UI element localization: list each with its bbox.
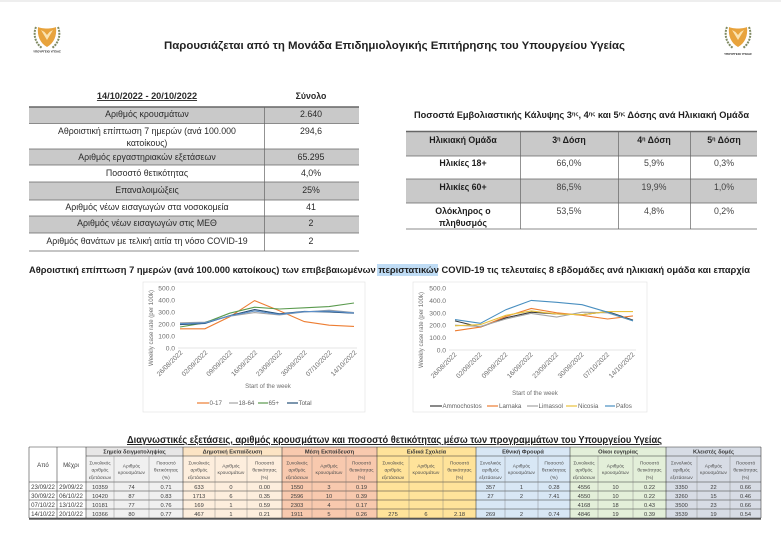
group: sampling points: 0.76 — [160, 503, 172, 509]
group: national guard: Εθνική Φρουρά — [502, 450, 544, 456]
group: secondary education: θετικότητας — [349, 466, 374, 474]
header row — [429, 135, 741, 145]
group: national guard — [476, 447, 570, 518]
row: reinfections — [115, 185, 320, 195]
x axis labels: 30/09/2022 — [557, 351, 586, 380]
group: closed structures: 22 — [710, 485, 717, 491]
x axis labels: 09/09/2022 — [481, 351, 510, 380]
legend: Total — [298, 400, 312, 407]
row: ages 18+ — [439, 158, 734, 168]
header row: Δόση — [561, 135, 586, 145]
group: closed structures: 15 — [710, 494, 717, 500]
group: sampling points: Σημεία δειγματοληψίας — [103, 450, 166, 456]
y axis labels: 300.0 — [429, 310, 446, 318]
row: 7-day incidence: Αθροιστική επίπτωση 7 ημερών (ανά 100.000 — [58, 126, 236, 136]
row: laboratory tests — [78, 152, 325, 162]
group: care homes: αριθμός — [576, 466, 593, 474]
y axis labels: 200.0 — [429, 322, 446, 330]
group: primary education: 467 — [194, 512, 204, 518]
row: ages 18+: Ηλικίες 18+ — [439, 158, 487, 168]
group: care homes: κρουσμάτων — [602, 469, 630, 476]
header row: Δόση — [646, 135, 671, 145]
group: primary education: 169 — [194, 503, 204, 509]
series lines — [180, 301, 354, 329]
x axis labels: 16/09/2022 — [230, 349, 259, 378]
line chart: incidence by district — [413, 282, 647, 412]
group: national guard: αριθμός — [482, 466, 500, 474]
x axis labels: 26/08/2022 — [430, 351, 459, 380]
group: special schools: Ειδικά Σχολεία — [407, 450, 447, 456]
group: primary education: 1713 — [193, 494, 205, 500]
group: special schools: Συνολικός — [382, 460, 404, 466]
group: national guard: Αριθμός — [513, 462, 531, 470]
group: sampling points: 0.83 — [160, 494, 172, 500]
group: sampling points: θετικότητας — [154, 466, 179, 474]
group: secondary education — [282, 447, 377, 518]
x axis labels: 07/10/2022 — [582, 351, 611, 380]
legend: Pafos — [616, 403, 632, 410]
row: 7-day incidence: κατοίκους) — [127, 138, 167, 148]
row: ICU admissions: 2 — [309, 218, 314, 228]
group: sampling points: 10181 — [92, 503, 108, 509]
row: ages 18+: 5,9% — [644, 158, 664, 168]
x axis labels: 02/09/2022 — [181, 349, 210, 378]
row: 7-day incidence: 294,6 — [300, 126, 322, 136]
panel: weekly summary table — [29, 91, 359, 251]
y axis labels: 400.0 — [158, 298, 175, 304]
row: hospital admissions: 41 — [306, 202, 316, 212]
row: laboratory tests: 65.295 — [298, 152, 325, 162]
group: secondary education: 10 — [326, 494, 332, 500]
group: secondary education: 5 — [327, 512, 331, 518]
group: primary education: εξετάσεων — [188, 474, 211, 481]
row: whole population: Ολόκληρος ο — [435, 206, 491, 216]
group: national guard: 357 — [486, 485, 495, 491]
group: care homes: 18 — [612, 503, 619, 509]
group: primary education: (%) — [261, 475, 269, 481]
group: secondary education: 0.39 — [356, 494, 367, 500]
group: closed structures: 3539 — [675, 512, 688, 518]
row: positivity: 4,0% — [301, 168, 321, 178]
column: from date: Από — [37, 462, 49, 469]
group: care homes: (%) — [646, 475, 654, 481]
group: special schools: εξετάσεων — [382, 474, 405, 481]
group: closed structures: 23 — [710, 503, 717, 509]
group: national guard: 1 — [520, 485, 523, 491]
x axis labels: 14/10/2022 — [608, 351, 637, 380]
y axis labels: 200.0 — [158, 322, 175, 328]
column: from date — [31, 462, 55, 518]
group: secondary education: αριθμός — [289, 466, 306, 474]
row: cases: Αριθμός κρουσμάτων — [105, 109, 189, 119]
y axis labels: 100.0 — [429, 335, 446, 342]
group: care homes: Συνολικός — [573, 460, 595, 466]
row: laboratory tests: Αριθμός εργαστηριακών εξετάσεων — [78, 152, 216, 162]
group: secondary education: 2596 — [291, 494, 303, 500]
group: national guard: Ποσοστό — [544, 460, 564, 466]
group: care homes: Αριθμός — [607, 462, 625, 470]
group: closed structures: Αριθμός — [705, 462, 723, 470]
group: sampling points: Αριθμός — [123, 462, 141, 470]
column: from date: 30/09/22 — [31, 493, 55, 500]
column: from date: 23/09/22 — [31, 484, 55, 491]
table header: date range: 14/10/2022 - 20/10/2022 — [97, 91, 197, 101]
group: care homes: 4168 — [578, 503, 590, 509]
column: to date: Μέχρι — [63, 462, 80, 469]
group: sampling points: κρουσμάτων — [118, 469, 146, 476]
column: to date: 20/10/22 — [59, 511, 83, 518]
group: secondary education: 0.19 — [356, 485, 367, 491]
group: care homes: 19 — [612, 512, 619, 518]
y axis labels: 0.0 — [166, 346, 175, 352]
row: hospital admissions: Αριθμός νέων εισαγωγών στα νοσοκομεία — [65, 202, 229, 212]
header row: η — [642, 136, 646, 142]
group: primary education: 0.35 — [259, 494, 270, 500]
row: whole population: 53,5% — [557, 206, 582, 216]
group: national guard: 2 — [520, 512, 523, 518]
group: care homes: 0.22 — [644, 494, 655, 500]
group: sampling points: 10359 — [92, 485, 108, 491]
group: primary education: 1 — [229, 503, 233, 509]
heading: vaccination coverage: και 5 — [595, 110, 619, 120]
y axis labels: Weekly case rate (per 100k) — [418, 292, 425, 368]
row: positivity — [106, 168, 321, 178]
row: whole population: 0,2% — [714, 206, 734, 216]
group: sampling points: Ποσοστό — [156, 460, 176, 466]
row: ages 60+: 19,9% — [642, 182, 667, 192]
group: primary education: αριθμός — [191, 466, 208, 474]
column: to date: 06/10/22 — [59, 493, 83, 500]
y axis labels: 300.0 — [158, 310, 175, 316]
group: special schools: Αριθμός — [417, 462, 435, 470]
group: primary education: 6 — [229, 494, 233, 500]
panel: vaccination coverage table — [406, 131, 757, 229]
x axis labels: 23/09/2022 — [255, 349, 284, 378]
y axis labels: 400.0 — [429, 298, 446, 305]
group: special schools: κρουσμάτων — [413, 469, 440, 476]
row: ages 60+ — [439, 182, 734, 192]
group: primary education: Ποσοστό — [255, 460, 274, 466]
group: care homes: 0.43 — [644, 503, 655, 509]
row: ages 60+: Ηλικίες 60+ — [439, 182, 487, 192]
heading: vaccination coverage: Δόσης ανά Ηλικιακή Ομάδα — [625, 110, 750, 120]
group: primary education: θετικότητας — [252, 466, 277, 474]
group: secondary education: Μέση Εκπαίδευση — [305, 450, 355, 456]
heading: vaccination coverage: ης — [589, 112, 595, 118]
group: closed structures: (%) — [742, 475, 750, 481]
line chart: incidence by age group — [143, 282, 365, 412]
column: to date: 29/09/22 — [59, 484, 83, 491]
group: care homes — [570, 447, 666, 518]
legend: 18-64 — [238, 400, 255, 407]
y axis labels: 500.0 — [429, 286, 446, 292]
x axis labels: 09/09/2022 — [205, 349, 234, 378]
group: national guard: (%) — [550, 475, 558, 481]
group: secondary education: 1911 — [291, 512, 303, 518]
group: secondary education: (%) — [358, 475, 366, 481]
row: ICU admissions: Αριθμός νέων εισαγωγών στις ΜΕΘ — [77, 218, 217, 228]
y axis labels: 100.0 — [158, 334, 175, 340]
group: special schools: 2.18 — [454, 512, 465, 518]
group: sampling points: 0.71 — [160, 485, 172, 491]
group: national guard: θετικότητας — [542, 466, 567, 474]
group: care homes: 4550 — [578, 494, 590, 500]
column: from date: 07/10/22 — [31, 502, 55, 509]
heading: diagnostic tests table: Διαγνωστικές εξετάσεις, αριθμός κρουσμάτων και ποσοστό θετικότητας μέσω των προγραμμάτων του Υπουργείου Υγείας — [127, 435, 662, 446]
y axis labels — [418, 286, 446, 368]
x axis labels: 30/09/2022 — [280, 349, 309, 378]
group: closed structures: 3350 — [675, 485, 688, 491]
group: primary education: 0.59 — [259, 503, 270, 509]
group: secondary education: Ποσοστό — [352, 460, 371, 466]
group: primary education: 0 — [229, 485, 233, 491]
legend — [197, 400, 312, 407]
header row: Ηλικιακή Ομάδα — [429, 135, 497, 145]
group: special schools: θετικότητας — [447, 466, 472, 474]
group: closed structures: Κλειστές δομές — [693, 450, 734, 456]
header row: η — [557, 136, 561, 142]
legend: 0-17 — [210, 400, 222, 407]
group: primary education — [183, 447, 282, 518]
column: from date: 14/10/22 — [31, 511, 55, 518]
header row: η — [712, 136, 716, 142]
icon: right ministry emblem — [724, 27, 752, 56]
row: ages 18+: 0,3% — [714, 158, 734, 168]
row: deaths: 2 — [309, 236, 314, 246]
legend: Nicosia — [578, 403, 599, 410]
row: whole population: 4,8% — [644, 206, 664, 216]
group: closed structures: 0.66 — [740, 485, 751, 491]
group: secondary education: 0.26 — [356, 512, 367, 518]
group: sampling points: 80 — [128, 512, 135, 518]
icon: left ministry emblem — [33, 27, 61, 54]
x axis labels: 07/10/2022 — [305, 349, 334, 378]
group: secondary education: Συνολικός — [286, 460, 308, 466]
icon: left ministry emblem: ΥΠΟΥΡΓΕΙΟ ΥΓΕΙΑΣ — [33, 50, 61, 54]
group: sampling points: αριθμός — [92, 466, 109, 474]
x axis labels — [430, 351, 637, 397]
group: care homes: 4556 — [578, 485, 590, 491]
group: special schools: Ποσοστό — [450, 460, 469, 466]
group: sampling points: 10366 — [92, 512, 108, 518]
group: secondary education: 2303 — [291, 503, 303, 509]
column: to date — [59, 462, 83, 518]
group: care homes: 0.39 — [644, 512, 655, 518]
heading: vaccination coverage: ης — [619, 112, 625, 118]
heading: vaccination coverage: , 4 — [578, 110, 589, 120]
group: national guard: κρουσμάτων — [508, 469, 536, 476]
group: special schools: αριθμός — [385, 466, 402, 474]
group: closed structures: κρουσμάτων — [700, 469, 728, 476]
x axis labels: 23/09/2022 — [531, 351, 560, 380]
group: closed structures: εξετάσεων — [670, 474, 693, 481]
group: national guard: 2 — [520, 494, 523, 500]
legend: Limassol — [538, 403, 563, 410]
group: care homes: 4846 — [578, 512, 590, 518]
group: primary education: 0.21 — [259, 512, 270, 518]
group: closed structures: 3260 — [675, 494, 688, 500]
group: primary education: Αριθμός — [222, 462, 240, 470]
group: primary education: 633 — [194, 485, 204, 491]
group: secondary education: 0.17 — [356, 503, 367, 509]
group: sampling points — [86, 447, 183, 518]
row: whole population — [435, 206, 734, 228]
group: secondary education: Αριθμός — [320, 462, 338, 470]
group: primary education: Συνολικός — [188, 460, 210, 466]
row: positivity: Ποσοστό θετικότητας — [106, 168, 188, 178]
row: ICU admissions — [77, 218, 314, 228]
group: secondary education: 4 — [327, 503, 331, 509]
panel: diagnostic tests table — [29, 447, 761, 519]
group: care homes: 0.22 — [644, 485, 655, 491]
table header: total: Σύνολο — [296, 91, 327, 101]
x axis labels: 16/09/2022 — [506, 351, 535, 380]
group: national guard: 269 — [486, 512, 495, 518]
x axis labels: 02/09/2022 — [455, 351, 484, 380]
row: reinfections: Επαναλοιμώξεις — [115, 185, 179, 195]
series lines — [455, 300, 633, 331]
group: national guard: 0.74 — [548, 512, 560, 518]
group: sampling points: 77 — [128, 503, 135, 509]
group: secondary education: 1550 — [291, 485, 303, 491]
group: primary education: 1 — [229, 512, 233, 518]
row: deaths: Αριθμός θανάτων με τελική αιτία τη νόσο COVID-19 — [46, 236, 248, 246]
x axis labels: 26/08/2022 — [156, 349, 185, 378]
legend: Ammochostos — [442, 403, 482, 410]
group: national guard: 27 — [487, 494, 494, 500]
group: secondary education: κρουσμάτων — [316, 469, 343, 476]
row: cases — [105, 109, 322, 119]
y axis labels: 500.0 — [158, 286, 175, 292]
row: ages 18+: 66,0% — [557, 158, 582, 168]
group: care homes: θετικότητας — [637, 466, 662, 474]
group: secondary education: 3 — [327, 485, 331, 491]
group: secondary education: εξετάσεων — [286, 474, 309, 481]
row: ages 60+: 86,5% — [557, 182, 582, 192]
group: closed structures: αριθμός — [673, 466, 691, 474]
group: closed structures: θετικότητας — [733, 466, 758, 474]
legend: 65+ — [268, 400, 279, 407]
group: sampling points: 0.77 — [160, 512, 172, 518]
header row: 4 — [637, 135, 642, 145]
group: sampling points: 74 — [128, 485, 135, 491]
column: to date: 13/10/22 — [59, 502, 83, 509]
group: special schools: (%) — [456, 475, 464, 481]
group: closed structures: 0.46 — [740, 494, 751, 500]
group: care homes: Ποσοστό — [640, 460, 659, 466]
header row: 5 — [707, 135, 712, 145]
group: special schools: 6 — [424, 512, 428, 518]
group: care homes: 10 — [612, 494, 619, 500]
x axis labels: 14/10/2022 — [330, 349, 359, 378]
title: Παρουσιάζεται από τη Μονάδα Επιδημιολογικής Επιτήρησης του Υπουργείου Υγείας — [164, 40, 625, 52]
y axis labels: 0.0 — [437, 348, 446, 354]
group: care homes: Οίκοι ευγηρίας — [598, 450, 638, 456]
group: special schools — [377, 447, 476, 518]
group: primary education: κρουσμάτων — [218, 469, 245, 476]
group: sampling points: (%) — [162, 475, 170, 481]
x axis labels: Start of the week — [512, 390, 559, 397]
row: reinfections: 25% — [302, 185, 320, 195]
header row: 3 — [552, 135, 557, 145]
group: special schools: 275 — [388, 512, 398, 518]
group: sampling points: 87 — [128, 494, 135, 500]
x axis labels: Start of the week — [245, 383, 292, 390]
legend: Larnaka — [499, 403, 522, 410]
group: sampling points: 10420 — [92, 494, 108, 500]
group: national guard: 0.28 — [548, 485, 560, 491]
group: sampling points: εξετάσεων — [89, 474, 112, 481]
row: hospital admissions — [65, 202, 316, 212]
x axis labels — [156, 349, 359, 390]
group: sampling points: Συνολικός — [89, 460, 111, 466]
group: closed structures: 19 — [710, 512, 717, 518]
group: national guard: Συνολικός — [480, 460, 502, 466]
group: closed structures: 0.66 — [740, 503, 751, 509]
group: care homes: 10 — [612, 485, 619, 491]
group: care homes: εξετάσεων — [573, 474, 596, 481]
group: national guard: εξετάσεων — [479, 474, 502, 481]
y axis labels: Weekly case rate (per 100k) — [148, 290, 155, 366]
heading: vaccination coverage: Ποσοστά Εμβολιαστικής Κάλυψης 3 — [414, 110, 564, 120]
heading: incidence charts: Αθροιστική επίπτωση 7 ημερών (ανά 100.000 κατοίκους) των επιβεβαιωμένων περιστατικών COVID-19 τις τελευταίες 8 εβδομάδες ανά ηλικιακή ομάδα και επαρχία — [29, 265, 750, 275]
group: primary education: 0.00 — [259, 485, 270, 491]
group: closed structures: Συνολικός — [671, 460, 693, 466]
row: 7-day incidence — [58, 126, 322, 148]
group: closed structures — [666, 447, 761, 518]
row: cases: 2.640 — [300, 109, 322, 119]
group: national guard: 7.41 — [548, 494, 560, 500]
row: whole population: πληθυσμός — [439, 218, 487, 228]
group: closed structures: Ποσοστό — [736, 460, 755, 466]
row: ages 60+: 1,0% — [714, 182, 734, 192]
icon: right ministry emblem: ΥΠΟΥΡΓΕΙΟ ΥΓΕΙΑΣ — [724, 52, 752, 56]
group: closed structures: 3500 — [675, 503, 688, 509]
heading: vaccination coverage: ης — [572, 112, 579, 118]
legend — [430, 403, 632, 410]
header row: Δόση — [716, 135, 741, 145]
group: primary education: Δημοτική Εκπαίδευση — [203, 450, 263, 456]
group: closed structures: 0.54 — [740, 512, 751, 518]
y axis labels — [148, 286, 175, 366]
